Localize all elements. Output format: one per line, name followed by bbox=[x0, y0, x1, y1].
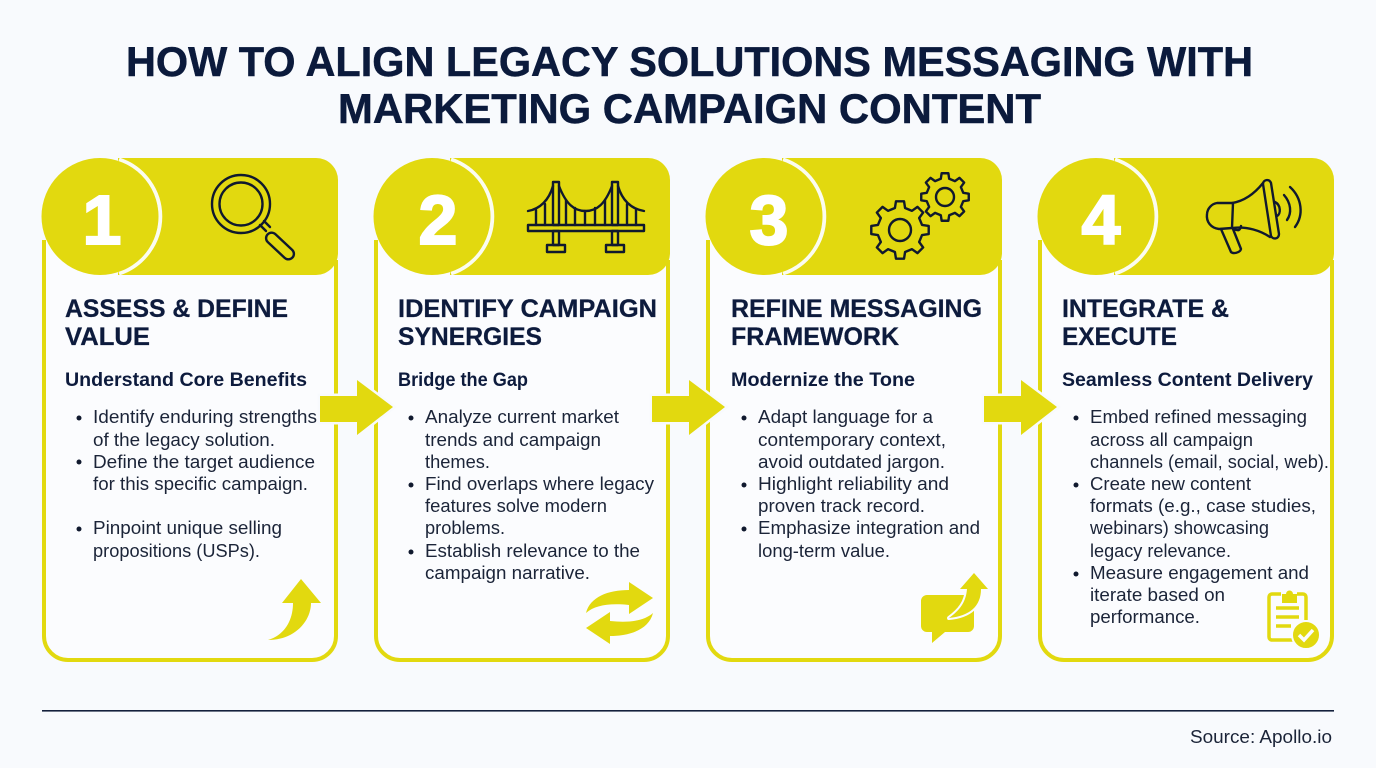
step 1 bullet list: Define the target audience bbox=[93, 452, 315, 472]
number badge 1 bbox=[42, 158, 160, 275]
arrow: step 1 to step 2 bbox=[320, 380, 393, 435]
step 4 heading: EXECUTE bbox=[1062, 323, 1177, 351]
number badge 2 bbox=[374, 158, 492, 275]
step 3 heading: REFINE MESSAGING bbox=[731, 295, 982, 323]
step 2 bullet list: Find overlaps where legacy bbox=[425, 474, 654, 494]
icon: suspension bridge bbox=[528, 182, 644, 252]
title bbox=[126, 38, 1253, 132]
step 3 bullet list: avoid outdated jargon. bbox=[758, 452, 945, 472]
step 1 bullet list: Pinpoint unique selling bbox=[93, 518, 282, 538]
icon: megaphone bbox=[1207, 180, 1301, 253]
step 4 bullet list: channels (email, social, web). bbox=[1090, 452, 1329, 472]
icon: magnifying glass bbox=[212, 175, 296, 262]
step 1 heading: VALUE bbox=[65, 323, 150, 351]
number badge 4 bbox=[1038, 158, 1156, 275]
step 2 bullet list: campaign narrative. bbox=[425, 563, 590, 583]
step 4 bullet list: legacy relevance. bbox=[1090, 541, 1231, 561]
step 4 heading: INTEGRATE & bbox=[1062, 295, 1229, 323]
step 2 subheading: Bridge the Gap bbox=[398, 370, 528, 391]
panel: step 1 assess and define value bbox=[42, 158, 338, 660]
step 4 bullet list: formats (e.g., case studies, bbox=[1090, 496, 1316, 516]
icon: chat bubble with rising arrow bbox=[921, 573, 988, 643]
step 4 bullet list: webinars) showcasing bbox=[1089, 518, 1269, 538]
step 4 bullet list: across all campaign bbox=[1090, 430, 1253, 450]
step 4 bullet list: performance. bbox=[1090, 607, 1200, 627]
title: HOW TO ALIGN LEGACY SOLUTIONS MESSAGING WITH bbox=[126, 38, 1253, 85]
header band 4 bbox=[1114, 158, 1334, 275]
panel: step 4 integrate and execute bbox=[1038, 158, 1334, 660]
icon: gears bbox=[871, 173, 969, 259]
step 3 bullet list: Highlight reliability and bbox=[758, 474, 949, 494]
step 2 bullet list: problems. bbox=[425, 518, 505, 538]
icon: curved up arrow bbox=[268, 579, 321, 640]
panel: step 2 identify campaign synergies bbox=[374, 158, 670, 660]
footer rule bbox=[42, 710, 1334, 712]
step 1 bullet list bbox=[76, 407, 317, 561]
step 3 bullet list: Emphasize integration and bbox=[758, 518, 980, 538]
step 1 bullet list: propositions (USPs). bbox=[93, 541, 260, 561]
step 4 subheading: Seamless Content Delivery bbox=[1062, 370, 1313, 391]
step 3 bullet list: long-term value. bbox=[758, 541, 890, 561]
header band 2 bbox=[450, 158, 670, 275]
step 3 heading: FRAMEWORK bbox=[731, 323, 899, 351]
step 2 bullet list bbox=[408, 407, 654, 583]
header band 1 bbox=[118, 158, 338, 275]
step 3 heading bbox=[731, 295, 982, 351]
step 2 heading: SYNERGIES bbox=[398, 323, 542, 351]
arrow: step 3 to step 4 bbox=[984, 380, 1057, 435]
number badge 2: 2 bbox=[419, 181, 457, 259]
step 3 subheading: Modernize the Tone bbox=[731, 370, 915, 391]
title: MARKETING CAMPAIGN CONTENT bbox=[338, 85, 1041, 132]
step 2 heading bbox=[398, 295, 657, 351]
step 2 bullet list: Analyze current market bbox=[425, 407, 619, 427]
step 4 bullet list: Embed refined messaging bbox=[1090, 407, 1307, 427]
icon: swap arrows bbox=[586, 582, 653, 644]
arrow: step 2 to step 3 bbox=[652, 380, 725, 435]
step 4 bullet list: Create new content bbox=[1090, 474, 1251, 494]
step 1 subheading: Understand Core Benefits bbox=[65, 370, 307, 391]
step 4 bullet list: iterate based on bbox=[1090, 585, 1225, 605]
step 4 bullet list bbox=[1074, 407, 1329, 627]
number badge 3 bbox=[706, 158, 824, 275]
step 2 bullet list: features solve modern bbox=[425, 496, 607, 516]
number badge 1: 1 bbox=[83, 181, 121, 259]
step 3 bullet list: proven track record. bbox=[758, 496, 925, 516]
step 3 bullet list: Adapt language for a bbox=[758, 407, 934, 427]
step 1 bullet list: for this specific campaign. bbox=[93, 474, 308, 494]
step 2 bullet list: trends and campaign bbox=[425, 430, 601, 450]
source note: Source: Apollo.io bbox=[1190, 727, 1332, 747]
step 1 bullet list: Identify enduring strengths bbox=[93, 407, 317, 427]
step 2 heading: IDENTIFY CAMPAIGN bbox=[398, 295, 657, 323]
number badge 3: 3 bbox=[750, 181, 788, 259]
step 1 heading bbox=[65, 295, 288, 351]
step 3 bullet list: contemporary context, bbox=[758, 430, 946, 450]
icon: clipboard with check mark bbox=[1269, 590, 1320, 649]
step 2 bullet list: themes. bbox=[425, 452, 490, 472]
number badge 4: 4 bbox=[1082, 181, 1121, 259]
step 3 bullet list bbox=[742, 407, 980, 561]
step 1 heading: ASSESS & DEFINE bbox=[65, 295, 288, 323]
panel: step 3 refine messaging framework bbox=[706, 158, 1002, 660]
header band 3 bbox=[782, 158, 1002, 275]
step 2 bullet list: Establish relevance to the bbox=[425, 541, 640, 561]
step 1 bullet list: of the legacy solution. bbox=[93, 430, 275, 450]
step 4 bullet list: Measure engagement and bbox=[1090, 563, 1309, 583]
step 4 heading bbox=[1062, 295, 1229, 351]
